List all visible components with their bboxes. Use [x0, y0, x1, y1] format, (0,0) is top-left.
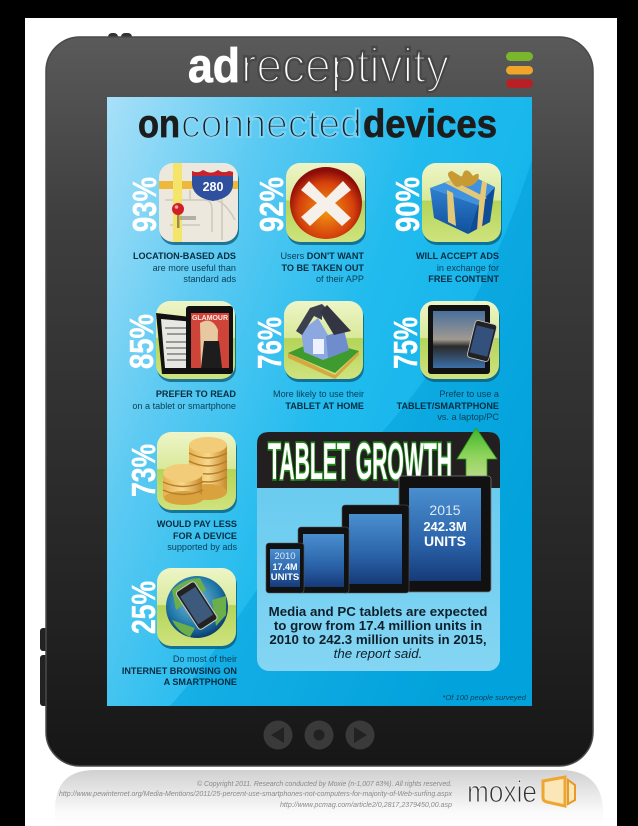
- label 2010: 17.4M: [272, 562, 298, 572]
- caption: [133, 251, 236, 284]
- panel text: to grow from 17.4 million units in: [274, 618, 482, 633]
- panel: tablet growth: [257, 428, 500, 671]
- heading: on connected devices: on: [138, 103, 180, 146]
- caption: Users DON'T WANT: [280, 251, 364, 261]
- percent 90: 90%: [389, 177, 426, 232]
- device reflection: [55, 770, 603, 826]
- label 2010: [271, 551, 299, 583]
- percent 25: 25%: [125, 581, 162, 634]
- label 2010: 2010: [274, 551, 296, 562]
- label 2015: 242.3M: [423, 519, 467, 534]
- icon: red cross: [286, 163, 366, 245]
- header band: [257, 432, 500, 488]
- icon: house: [284, 301, 364, 382]
- tablet 3: [342, 505, 409, 593]
- caption: [416, 251, 499, 284]
- navigation buttons: [264, 720, 374, 750]
- panel text: Media and PC tablets are expected: [269, 604, 487, 619]
- caption: WOULD PAY LESS: [157, 519, 237, 529]
- stat: 90% will accept ads: [389, 163, 502, 284]
- caption: PREFER TO READ: [156, 389, 236, 399]
- copyright and sources: [59, 779, 453, 809]
- caption: FREE CONTENT: [428, 274, 499, 284]
- caption: [132, 389, 236, 411]
- label 2015: UNITS: [424, 533, 466, 549]
- caption: Do most of their: [173, 654, 237, 664]
- status lights: [506, 52, 533, 88]
- arrow up: [457, 428, 497, 490]
- logo: moxie: moxie: [467, 774, 537, 809]
- percent 73: 73%: [125, 444, 162, 497]
- caption: TO BE TAKEN OUT: [281, 263, 364, 273]
- tablet device body: [40, 33, 593, 766]
- icon: coins: [157, 432, 237, 513]
- stat: 25% internet browsing: [122, 568, 237, 687]
- percent 93: 93%: [126, 177, 163, 232]
- caption: vs. a laptop/PC: [437, 412, 499, 422]
- caption: LOCATION-BASED ADS: [133, 251, 236, 261]
- copyright and sources: http://www.pewinternet.org/Media-Mentions/2011/25-percent-use-smartphones-not-computers-for-majority-of-Web-surfing.aspx: [59, 789, 453, 798]
- caption: A SMARTPHONE: [164, 677, 237, 687]
- label 2015: 2015: [429, 502, 461, 518]
- stat: 85% prefer to read: [123, 301, 236, 411]
- stat: 73% would pay less: [125, 432, 237, 552]
- percent 92: 92%: [253, 177, 290, 232]
- caption: [157, 519, 237, 552]
- panel text: 2010 to 242.3 million units in 2015,: [269, 632, 487, 647]
- icon: orange box: [543, 777, 575, 806]
- tablets bar chart: [266, 476, 491, 593]
- caption: [280, 251, 364, 284]
- title: ad receptivity: ad: [188, 40, 240, 93]
- caption: standard ads: [183, 274, 236, 284]
- stat: 93% location-based ads: [126, 163, 239, 284]
- copyright and sources: © Copyright 2011. Research conducted by Moxie (n-1,007 #3%). All rights reserved.: [197, 779, 452, 788]
- panel text: [269, 604, 487, 661]
- footnote: *Of 100 people surveyed: [442, 693, 527, 702]
- screen panel: [107, 97, 532, 706]
- icon: gift box: [422, 163, 502, 245]
- stat: 75% tablet/smartphone: [387, 301, 500, 422]
- stat: 76% tablet at home: [251, 301, 364, 411]
- caption: TABLET/SMARTPHONE: [397, 401, 499, 411]
- tablet 2015: [399, 476, 491, 592]
- heading: on connected devices: connected: [181, 103, 362, 146]
- caption: More likely to use their: [273, 389, 364, 399]
- icon: map: 280: [203, 180, 223, 194]
- percent 76: 76%: [251, 317, 288, 369]
- percent 85: 85%: [123, 314, 160, 369]
- heading: on connected devices: devices: [363, 103, 497, 146]
- caption: are more useful than: [153, 263, 236, 273]
- caption: FOR A DEVICE: [173, 531, 237, 541]
- caption: [122, 654, 237, 687]
- caption: Prefer to use a: [439, 389, 500, 399]
- caption: WILL ACCEPT ADS: [416, 251, 499, 261]
- caption: on a tablet or smartphone: [132, 401, 236, 411]
- tablet 2: [298, 527, 349, 593]
- icon: tablet and phone: [420, 301, 500, 382]
- label 2010: UNITS: [271, 572, 299, 583]
- panel text: the report said.: [334, 646, 422, 661]
- heading: on connected devices: [138, 103, 497, 146]
- caption: of their APP: [316, 274, 364, 284]
- caption: supported by ads: [167, 542, 237, 552]
- tablet 2010: [266, 543, 304, 593]
- percent 75: 75%: [387, 317, 424, 369]
- caption: INTERNET BROWSING ON: [122, 666, 237, 676]
- stat: 92% don't want to be taken out: [253, 163, 366, 284]
- caption: in exchange for: [437, 263, 499, 273]
- label 2015: [423, 502, 467, 549]
- caption: [273, 389, 364, 411]
- title: ad receptivity: receptivity: [241, 40, 449, 93]
- icon: globe with phone: [157, 568, 237, 649]
- copyright and sources: http://www.pcmag.com/article2/0,2817,2379450,00.asp: [280, 800, 452, 809]
- caption: [397, 389, 500, 422]
- caption: TABLET AT HOME: [285, 401, 364, 411]
- icon: magazine on tablet: GLAMOUR: [192, 313, 229, 322]
